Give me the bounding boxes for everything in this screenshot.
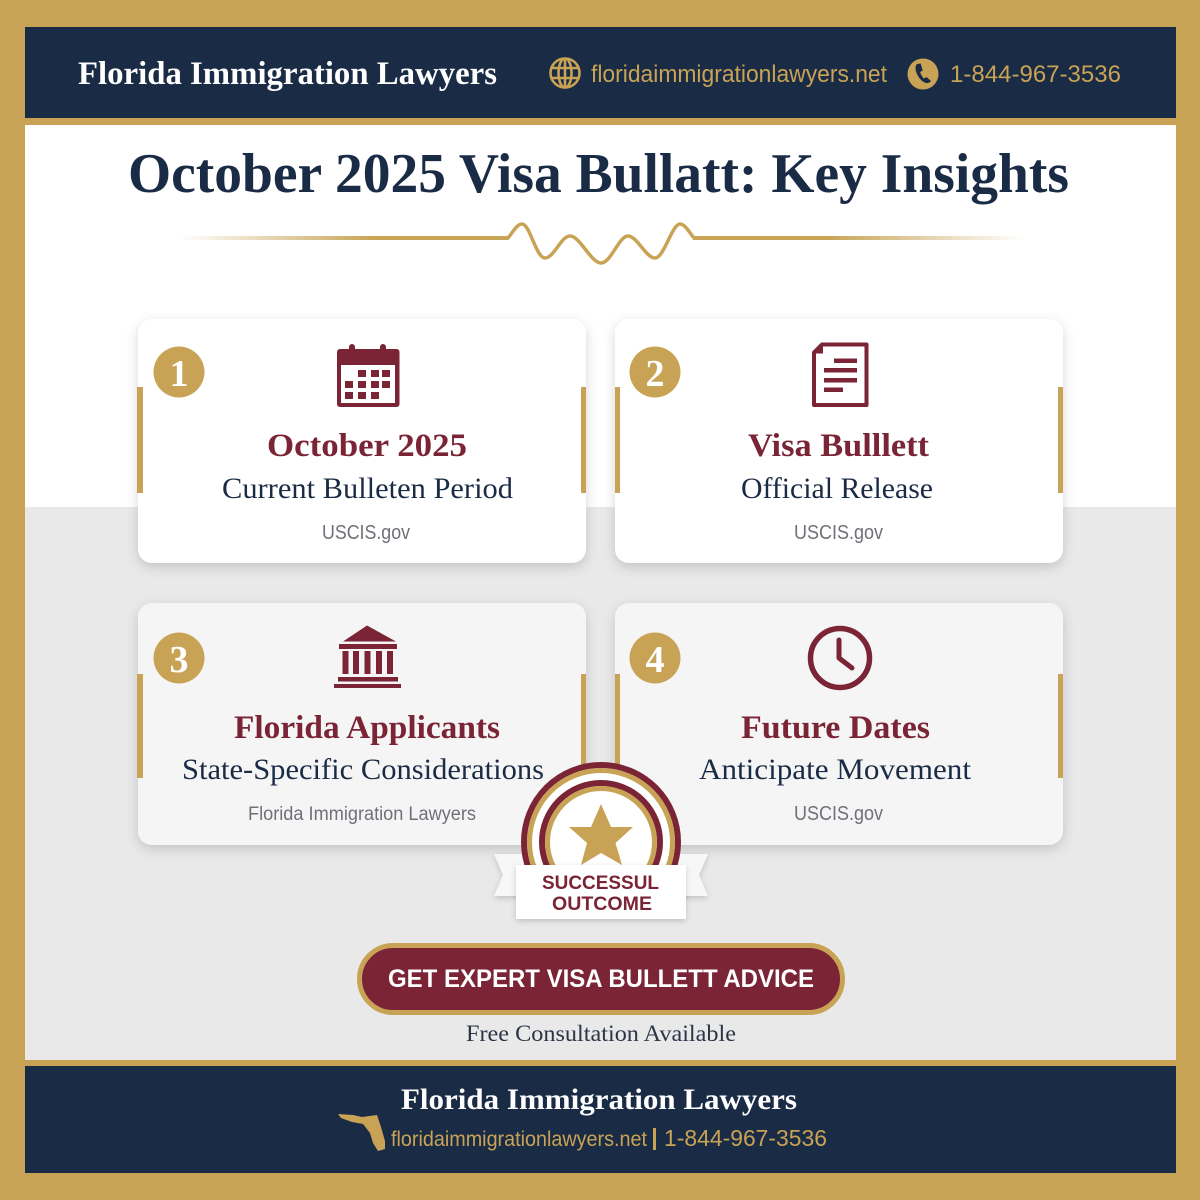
icon: globe (550, 58, 580, 88)
card 4 source: USCIS.gov (794, 803, 883, 825)
ribbon tails (494, 854, 708, 896)
panel: card 2 (615, 319, 1063, 563)
number badge 1: 1 (170, 353, 188, 395)
number badge 2: 2 (646, 353, 664, 395)
label plate (516, 865, 686, 919)
footer phone number: 1-844-967-3536 (664, 1125, 827, 1151)
card 1 subheading: Current Bulleten Period (222, 472, 513, 505)
icon: calendar (337, 344, 400, 407)
gold side accents (137, 674, 586, 778)
call to action button: GET EXPERT VISA BULLETT ADVICE (388, 965, 814, 993)
number badge 4: 4 (646, 639, 664, 681)
gold star (569, 804, 633, 865)
card 1 source: USCIS.gov (322, 522, 410, 544)
card 2 subheading: Official Release (741, 472, 933, 505)
footer bar (25, 1066, 1176, 1173)
icon: courthouse (334, 626, 401, 688)
gold side accents (137, 387, 586, 493)
icon: document (814, 344, 866, 405)
header phone number: 1-844-967-3536 (950, 61, 1121, 88)
number badge 4 (630, 632, 680, 684)
card 3 source: Florida Immigration Lawyers (248, 804, 476, 825)
header bar (25, 27, 1176, 118)
number badge 1 (154, 346, 204, 398)
badge: successful outcome seal (494, 765, 708, 919)
header website: floridaimmigrationlawyers.net (591, 61, 887, 88)
card 3 heading: Florida Applicants (234, 710, 500, 746)
card 2 heading: Visa Bulllett (748, 428, 929, 464)
footer website and phone: floridaimmigrationlawyers.net (391, 1128, 647, 1151)
panel: card 4 (615, 603, 1063, 845)
number badge 3: 3 (170, 639, 188, 681)
number badge 3 (154, 632, 204, 684)
icon: Florida map (338, 1114, 385, 1151)
footer separator (653, 1128, 656, 1150)
panel: card 3 (137, 603, 586, 845)
badge text line 1: SUCCESSUL (542, 873, 659, 894)
gold side accents (615, 387, 1063, 493)
card 1 heading: October 2025 (267, 428, 467, 464)
upper white content background (25, 125, 1176, 507)
badge text line 2: OUTCOME (552, 894, 652, 915)
icon: phone (908, 58, 938, 90)
card 3 subheading: State-Specific Considerations (182, 753, 544, 786)
footer firm name: Florida Immigration Lawyers (401, 1083, 797, 1116)
icon: clock (810, 628, 870, 688)
number badge 2 (630, 346, 680, 398)
card 4 heading: Future Dates (741, 710, 930, 746)
call to action button (360, 946, 842, 1012)
wavy gold divider (180, 224, 1023, 263)
card 2 source: USCIS.gov (794, 522, 883, 544)
card 4 subheading: Anticipate Movement (699, 753, 972, 786)
title: October 2025 Visa Bullatt: Key Insights (128, 143, 1069, 205)
medal rings (521, 762, 681, 865)
gold side accents (615, 674, 1063, 778)
consultation note: Free Consultation Available (466, 1021, 736, 1046)
panel: card 1 (137, 319, 586, 563)
lower grey content background (25, 507, 1176, 1060)
header firm name: Florida Immigration Lawyers (78, 56, 497, 92)
